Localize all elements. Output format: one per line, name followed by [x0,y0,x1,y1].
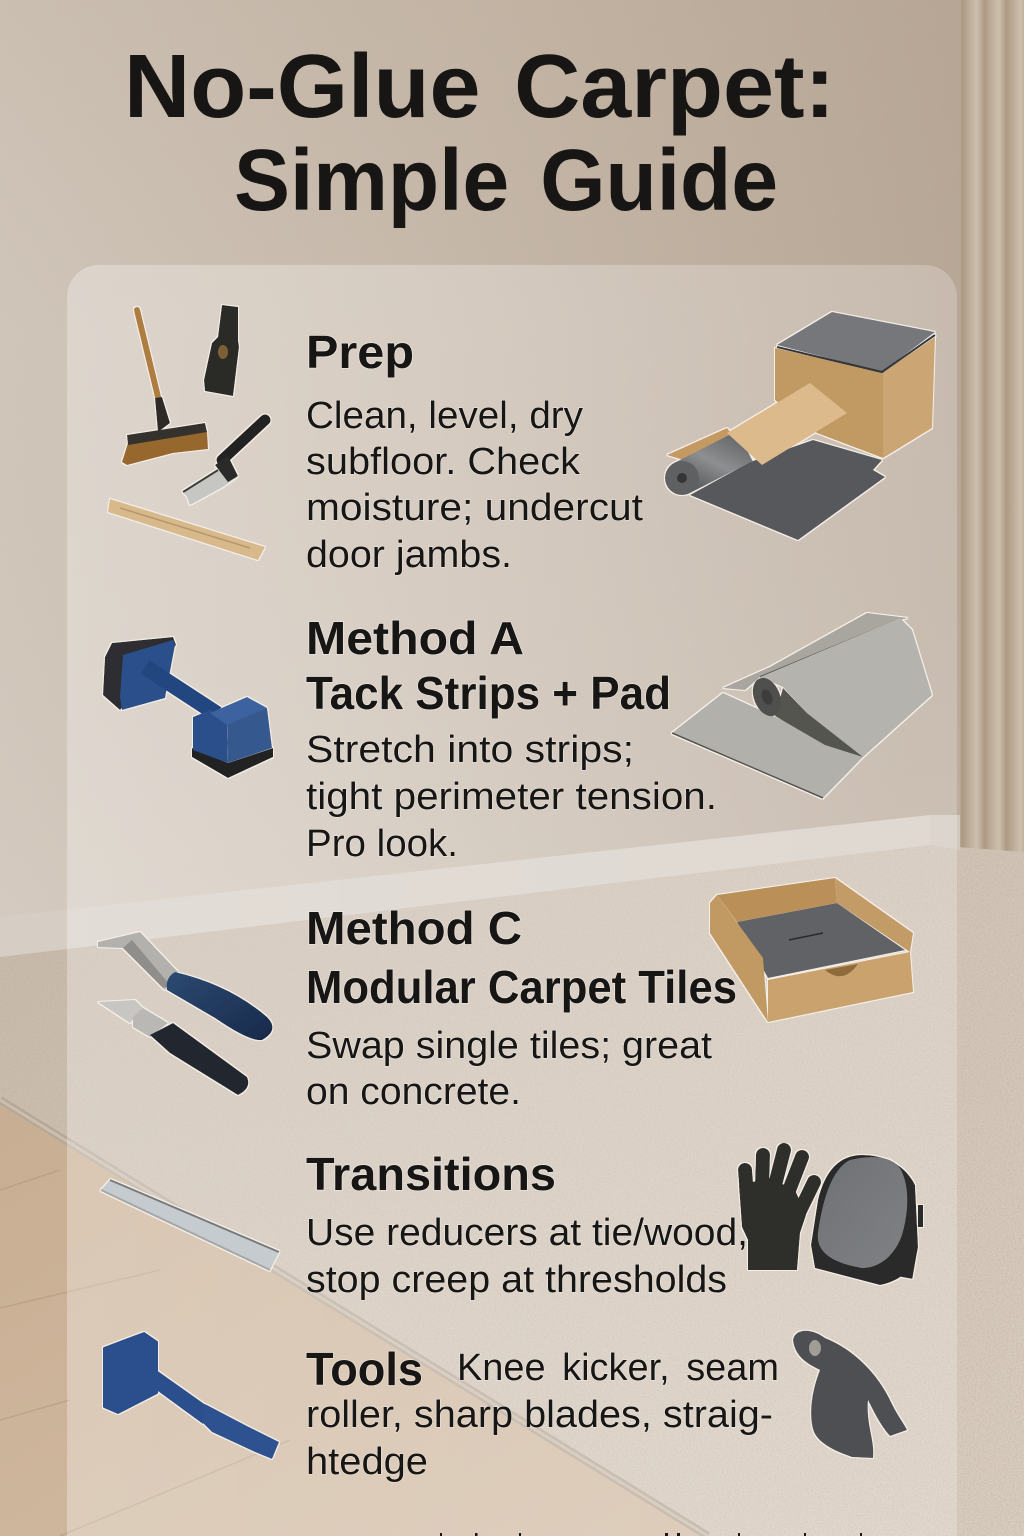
text block: Transitions body [306,1212,748,1301]
icon: gray seam roller [793,1331,907,1458]
icon: carpet roll, padding and box [665,312,935,540]
title [124,37,835,229]
text block: Tools body: htedge [306,1441,428,1483]
text block: Method C body: Swap single tiles; great [306,1025,712,1067]
section: Tools [306,1343,779,1483]
heading: Method A [306,612,671,719]
section: Prep [306,326,643,576]
text block: Prep body [306,395,643,576]
heading: Method C [306,902,737,1013]
carpet [0,845,1024,1536]
heading: Tools: Tools [306,1343,423,1395]
translucent content panel [67,265,957,1536]
title: Simple Guide [234,132,778,229]
curtain [960,0,1024,856]
text block: Prep body: door jambs. [306,534,512,576]
text block: Transitions body: stop creep at thresholds [306,1259,727,1301]
text block: Prep body: subfloor. Check [306,441,581,483]
heading: Method C: Method C [306,902,522,954]
heading: Method A: Method A [306,612,524,664]
text block: Prep body: Clean, level, dry [306,395,583,437]
text block: Tools body [306,1347,779,1483]
heading: Method A: Tack Strips + Pad [306,667,671,719]
icon: broom, plane, cutter and wood bar [108,305,265,560]
icon: work glove and knee pad [739,1150,923,1285]
title: No-Glue Carpet: [124,37,835,137]
wood floor [0,1105,704,1536]
icon: blue knee kicker [103,637,273,778]
section: Method C [306,902,737,1113]
text block: Transitions body: Use reducers at tie/wood, [306,1212,748,1254]
icon: carpet trimmer and utility knife [98,932,272,1095]
heading: Method C: Modular Carpet Tiles [306,961,737,1013]
icon: cardboard box of carpet tile [710,878,913,1022]
heading: Prep: Prep [306,326,414,378]
icon: blue wall kicker [104,1333,279,1459]
text block: Tools body: Knee kicker, seam [457,1347,779,1389]
clipped text line at bottom edge [440,1533,862,1536]
text block: Method C body: on concrete. [306,1071,521,1113]
baseboard [0,815,930,957]
icon: gray felt underlay roll [672,613,932,798]
text block: Prep body: moisture; undercut [306,487,643,529]
text block: Method A body [306,729,717,865]
icon: metal reducer strip [101,1180,279,1270]
text block: Method A body: Pro look. [306,823,458,865]
section: Transitions [306,1148,748,1301]
heading: Transitions: Transitions [306,1148,556,1200]
text block: Method A body: Stretch into strips; [306,729,634,771]
carpet trim [0,1100,708,1536]
text block: Method A body: tight perimeter tension. [306,776,717,818]
section: Method A [306,612,717,865]
text block: Method C body [306,1025,712,1113]
text block: Tools body: roller, sharp blades, straig- [306,1394,773,1436]
